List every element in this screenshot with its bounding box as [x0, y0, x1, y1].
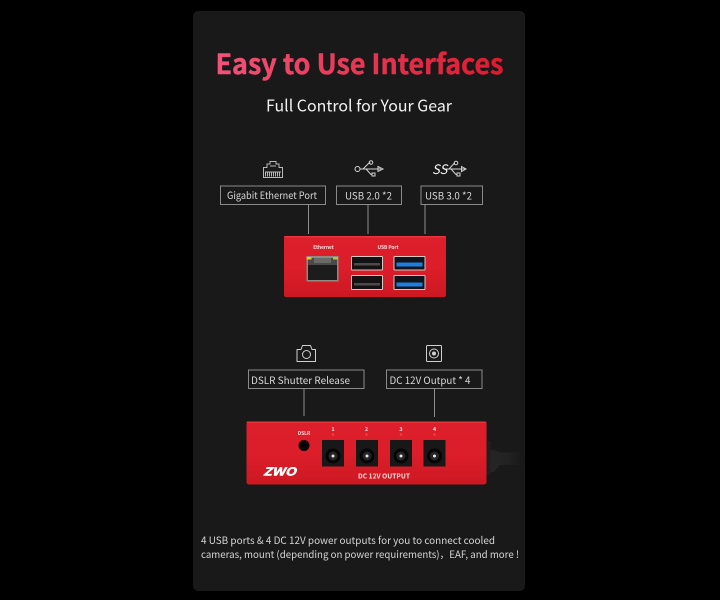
description text: cameras, mount (depending on power requirements)，EAF, and more !: [201, 546, 519, 561]
icon: USB 3.0 SuperSpeed symbol: [432, 159, 466, 178]
description text: [201, 532, 519, 561]
icon: USB 2.0 symbol: [355, 161, 383, 176]
subtitle: Full Control for Your Gear: [266, 92, 453, 116]
icon: USB 3.0 SuperSpeed symbol: SS: [432, 159, 449, 178]
ethernet socket: [306, 256, 338, 282]
output 2: 2: [365, 425, 368, 433]
connector lines: bottom: [304, 388, 434, 417]
label: USB 2.0: USB 2.0 *2: [345, 188, 392, 202]
output 3: 3: [399, 425, 403, 433]
label: DSLR Shutter Release: [248, 370, 364, 388]
label: USB 3.0: [421, 186, 482, 204]
title: Easy to Use Interfaces: [216, 42, 504, 82]
DSLR jack: DSLR: [298, 430, 311, 437]
icon: ethernet port: [264, 162, 282, 178]
logo: ZWO: ZWO: [263, 464, 298, 480]
power cable: [486, 441, 522, 475]
USB 3.0 sockets: [394, 256, 426, 290]
icon: camera: [297, 346, 316, 362]
label: USB 2.0: [336, 186, 402, 204]
label: DSLR Shutter Release: DSLR Shutter Release: [251, 372, 350, 387]
DSLR jack: [298, 430, 311, 451]
label: Gigabit Ethernet Port: Gigabit Ethernet Port: [227, 187, 317, 202]
description text: 4 USB ports & 4 DC 12V power outputs for you to connect cooled: [201, 532, 495, 547]
device: USB and Ethernet hub: [284, 236, 446, 297]
USB 2.0 sockets: [351, 256, 383, 290]
output 1: [322, 425, 344, 466]
label: USB 3.0: USB 3.0 *2: [425, 188, 472, 202]
output 4: [424, 425, 446, 466]
device: USB and Ethernet hub: Ethernet: [313, 244, 334, 251]
label: DC 12V Output: DC 12V Output * 4: [390, 372, 471, 387]
output 4: 4: [433, 425, 437, 433]
connector lines: top: [308, 204, 425, 234]
device: power output box: [246, 422, 486, 484]
output 1: 1: [331, 425, 335, 433]
output 2: [356, 425, 378, 466]
output caption: DC 12V OUTPUT: [358, 470, 410, 480]
panel: dark card: [193, 11, 525, 591]
output 3: [390, 425, 412, 466]
icon: DC power jack: [426, 346, 442, 362]
device: USB and Ethernet hub: USB Port: [377, 244, 399, 251]
